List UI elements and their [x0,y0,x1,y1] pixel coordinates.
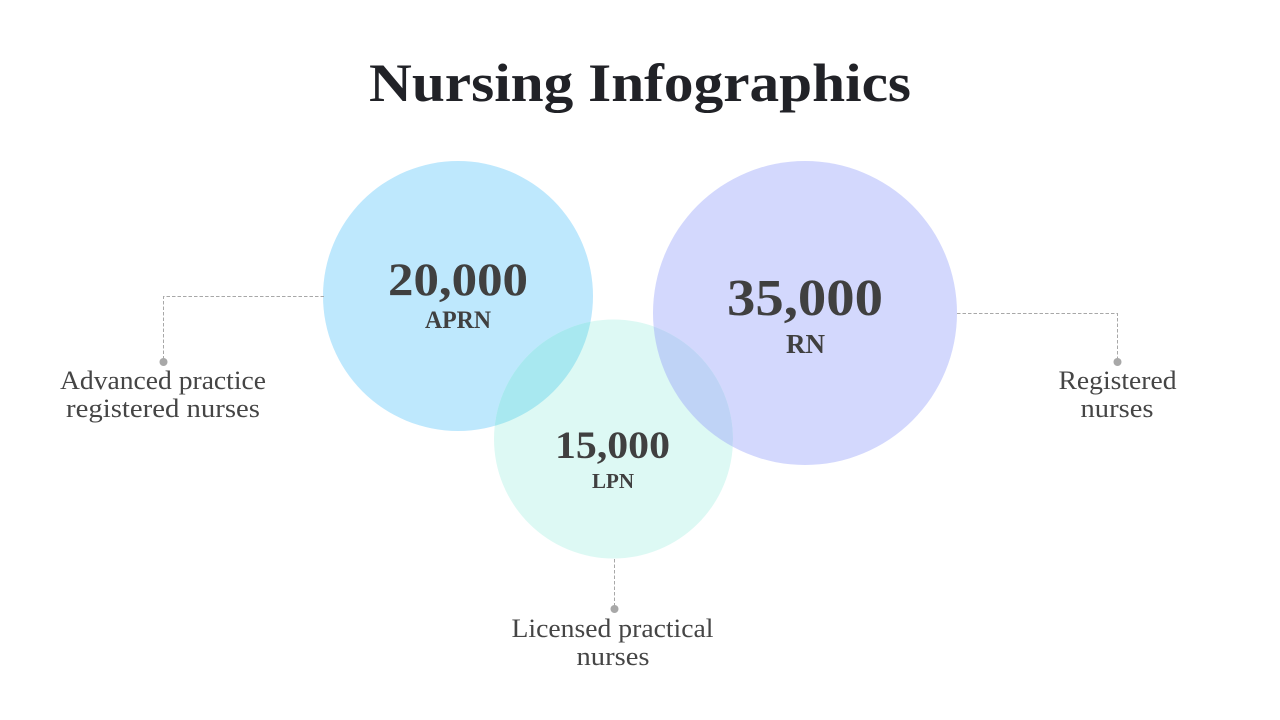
stat: LPN: 15,000 [555,424,670,467]
stat: LPN [555,424,670,493]
caption: RN: Registered [1058,366,1176,395]
circle: APRN [323,161,593,431]
caption: LPN: Licensed practical [512,614,714,643]
stat: RN: 35,000 [727,270,883,327]
connector: LPN [610,559,618,613]
title: Nursing Infographics [369,53,911,113]
caption: LPN [512,614,714,671]
stat: APRN: 20,000 [388,254,528,306]
stat: APRN [388,254,528,334]
connector: RN [957,314,1122,366]
caption: APRN [60,366,266,423]
caption: RN [1058,366,1176,423]
connector: APRN [160,296,324,366]
circle: LPN [494,320,733,558]
stat: APRN: APRN [425,307,491,334]
stat: RN [727,270,883,359]
caption: RN: nurses [1080,394,1154,423]
stat: RN: RN [786,329,825,359]
overlap: APRN and LPN [494,322,590,426]
circle: RN [653,161,957,465]
stat: LPN: LPN [592,469,634,493]
caption: APRN: Advanced practice [60,366,266,395]
caption: LPN: nurses [576,642,650,671]
overlap: RN and LPN [654,326,733,446]
caption: APRN: registered nurses [66,394,260,423]
